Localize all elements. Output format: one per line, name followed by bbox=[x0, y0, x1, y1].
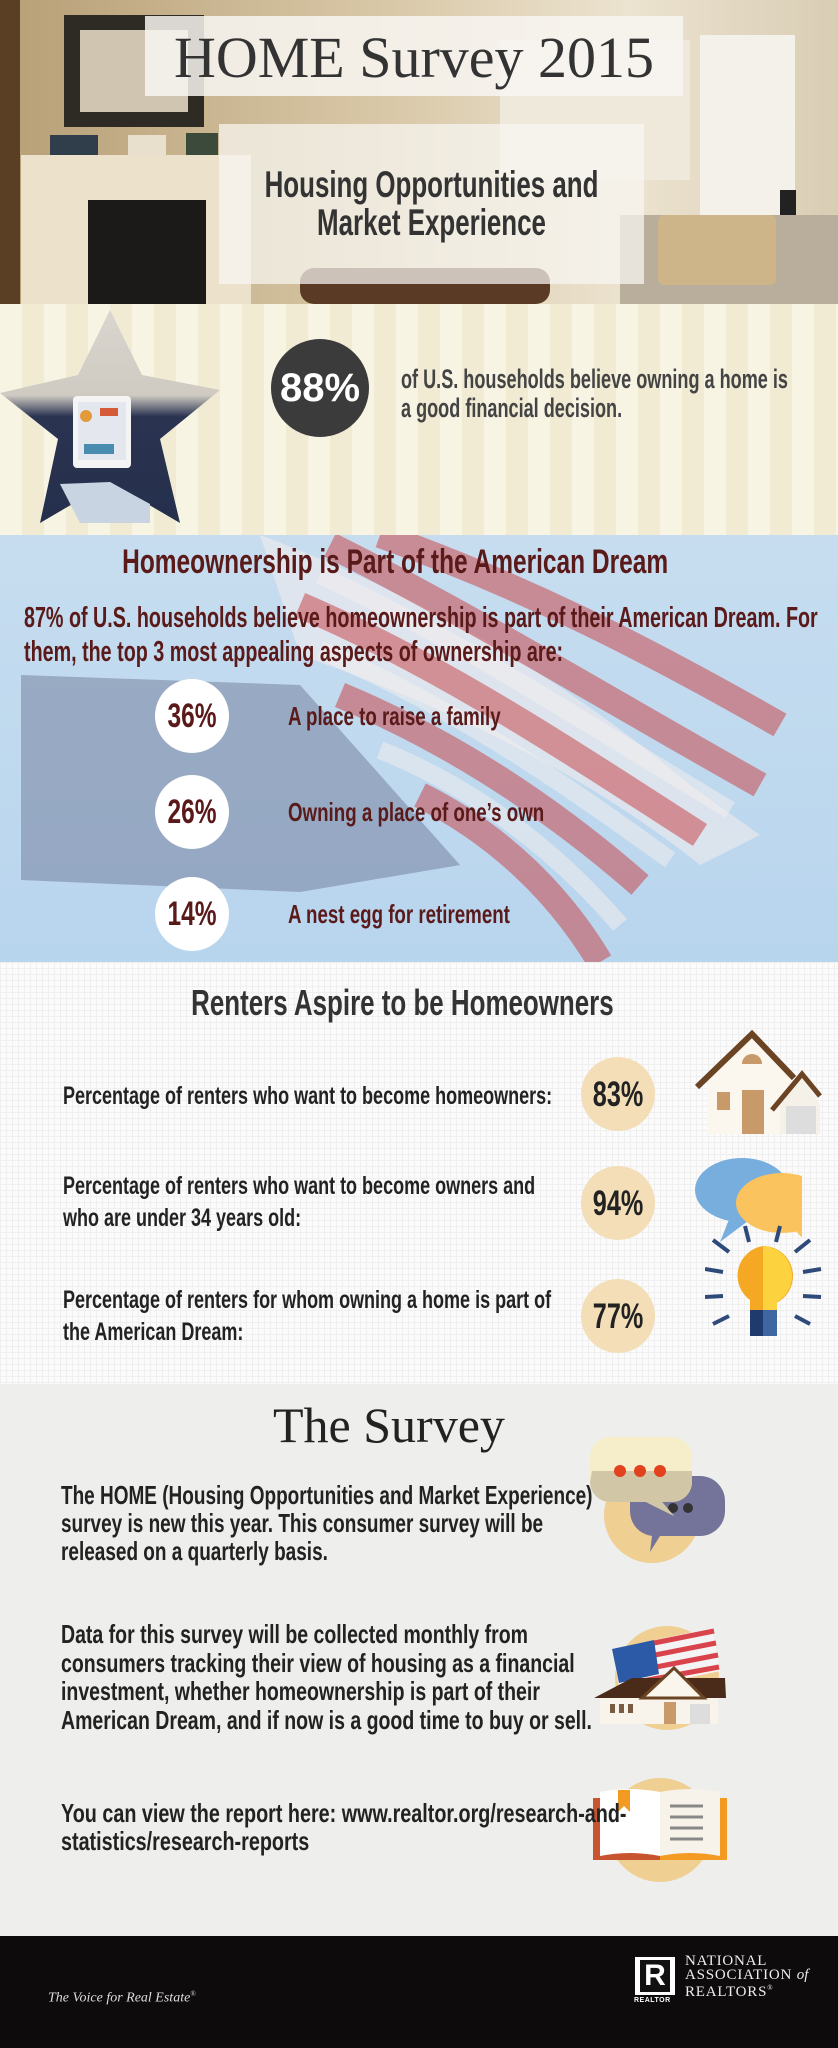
intro text: them, the top 3 most appealing aspects of ownership are: bbox=[24, 636, 563, 668]
icon: flag and house bbox=[594, 1626, 726, 1730]
logo: NAR: NATIONAL bbox=[685, 1953, 767, 1969]
item: 26%: 26% bbox=[167, 793, 217, 831]
text block 3 bbox=[61, 1798, 627, 1856]
item: 14%: 14% bbox=[167, 895, 217, 933]
icon: star photo bbox=[0, 310, 220, 523]
footer bbox=[0, 1936, 838, 2048]
stat circle: 88% bbox=[271, 339, 369, 437]
heading: Homeownership is Part of the American Dream bbox=[122, 543, 668, 581]
title: HOME Survey 2015 bbox=[174, 25, 654, 90]
panel: 88% stat bbox=[0, 304, 838, 535]
icon: lightbulb bbox=[705, 1226, 822, 1336]
intro text: 87% of U.S. households believe homeownership is part of their American Dream. For bbox=[24, 602, 818, 634]
row 2 text bbox=[63, 1172, 535, 1232]
item: 26%: Owning a place of one’s own bbox=[288, 797, 544, 827]
row 1 circle 83% bbox=[581, 1057, 655, 1131]
row 2 circle 94%: 94% bbox=[593, 1184, 643, 1222]
text block 3: You can view the report here: www.realtor.org/research-and- bbox=[61, 1798, 627, 1828]
item: 36%: 36% bbox=[167, 697, 217, 735]
logo: NAR: ASSOCIATION of bbox=[685, 1966, 808, 1982]
text block 1: released on a quarterly basis. bbox=[61, 1536, 328, 1566]
title box bbox=[145, 16, 683, 96]
logo: NAR: REALTORS® bbox=[685, 1984, 773, 2000]
text block 2: investment, whether homeownership is part of their bbox=[61, 1676, 540, 1706]
text block 2: consumers tracking their view of housing as a financial bbox=[61, 1648, 575, 1678]
subtitle box bbox=[219, 124, 644, 284]
row 3 text: the American Dream: bbox=[63, 1318, 243, 1346]
text block 1: survey is new this year. This consumer survey will be bbox=[61, 1508, 543, 1538]
header photo section bbox=[0, 0, 838, 304]
icon: book bbox=[593, 1778, 727, 1882]
panel: american dream bbox=[0, 535, 838, 962]
row 3 text bbox=[63, 1286, 552, 1346]
row 2 text: Percentage of renters who want to become owners and bbox=[63, 1172, 535, 1200]
stat text: of U.S. households believe owning a home is bbox=[401, 364, 788, 394]
item: 26% bbox=[155, 775, 544, 849]
flag background bbox=[21, 535, 786, 962]
icon: chat bubbles bbox=[590, 1437, 725, 1563]
text block 2: American Dream, and if now is a good time to buy or sell. bbox=[61, 1704, 592, 1734]
row 3 text: Percentage of renters for whom owning a home is part of bbox=[63, 1286, 551, 1314]
row 2 text: who are under 34 years old: bbox=[63, 1204, 301, 1232]
text block 2: Data for this survey will be collected monthly from bbox=[61, 1619, 528, 1649]
row 3 circle 77%: 77% bbox=[593, 1296, 643, 1336]
heading: The Survey bbox=[273, 1397, 505, 1453]
panel: the survey bbox=[0, 1384, 838, 1936]
stat text bbox=[401, 364, 788, 423]
subtitle: Market Experience bbox=[317, 202, 546, 243]
stat text: a good financial decision. bbox=[401, 393, 622, 423]
heading: Renters Aspire to be Homeowners bbox=[191, 982, 613, 1023]
panel: renters bbox=[0, 962, 838, 1384]
text block 2 bbox=[61, 1619, 592, 1734]
text block 3: statistics/research-reports bbox=[61, 1826, 309, 1856]
icon: speech bubbles bbox=[695, 1158, 802, 1242]
icon: house bbox=[695, 1030, 822, 1134]
stat circle: 88%: 88% bbox=[280, 366, 360, 410]
row 2 circle 94% bbox=[581, 1166, 655, 1240]
text block 1: The HOME (Housing Opportunities and Market Experience) bbox=[61, 1480, 593, 1510]
row 1 circle 83%: 83% bbox=[593, 1074, 643, 1114]
row 1 text: Percentage of renters who want to become homeowners: bbox=[63, 1082, 552, 1110]
subtitle: Housing Opportunities and bbox=[265, 164, 598, 205]
text block 1 bbox=[61, 1480, 593, 1566]
item: 14% bbox=[155, 877, 510, 951]
tagline: The Voice for Real Estate® bbox=[48, 1990, 196, 2006]
intro text bbox=[24, 602, 818, 668]
item: 14%: A nest egg for retirement bbox=[288, 899, 510, 929]
subtitle bbox=[265, 164, 598, 243]
item: 36% bbox=[155, 679, 501, 753]
logo: NAR: R bbox=[644, 1959, 666, 1992]
logo: NAR bbox=[634, 1953, 810, 2004]
row 3 circle 77% bbox=[581, 1279, 655, 1353]
logo: NAR: REALTOR bbox=[634, 1997, 671, 2004]
item: 36%: A place to raise a family bbox=[288, 701, 501, 731]
photo: living room background bbox=[0, 0, 838, 304]
